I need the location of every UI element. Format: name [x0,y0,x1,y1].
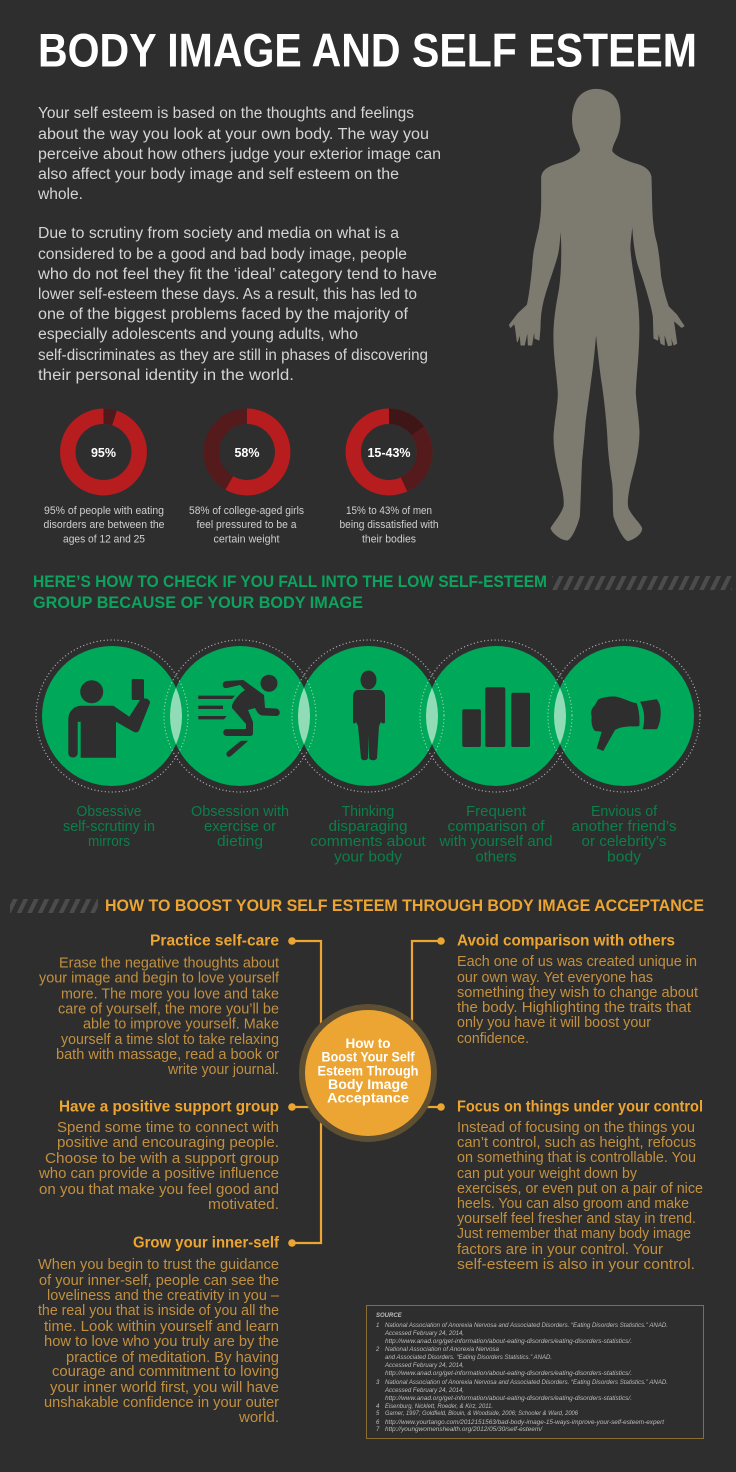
intro text block: one of the biggest problems faced by the majority of [38,306,409,323]
panel: grow your inner-self: Grow your inner-self [133,1234,280,1252]
panel: practice self-care: yourself a time slot to take relaxing [61,1032,279,1048]
central circle: Acceptance [327,1090,409,1106]
icon: standing figure [353,670,385,760]
caption: 58%: certain weight [214,534,280,546]
panel: sources: National Association of Anorexia Nervosa and Associated Disorders. “Eating Disorders Statistics.” ANAD. [385,1380,668,1386]
panel: sources: 6 [376,1420,380,1426]
panel: positive support group: Choose to be with a support group [45,1151,279,1167]
panel: sources: Garner, 1997; Goldfield, Blouin, & Woodside, 2006; Schooler & Ward, 2006 [385,1411,579,1417]
panel: sources: Accessed February 24, 2014, [384,1331,464,1337]
caption: 15-43% [340,505,438,546]
panel: avoid comparison: Avoid comparison with others [457,932,675,950]
panel: practice self-care: care of yourself, the more you’ll be [58,1001,279,1017]
panel: focus on things under your control: factors are in your control. Your [457,1242,663,1258]
caption: mirrors: Obsessive [76,803,142,820]
caption: envious: body [607,848,642,866]
intro text block [37,105,441,384]
caption: 95%: 95% of people with eating [44,505,164,517]
panel: practice self-care: Erase the negative thoughts about [59,956,279,972]
panel: sources: Accessed February 24, 2014, [384,1388,464,1394]
panel: grow your inner-self: practice of meditation. By having [66,1350,279,1366]
caption: comparison: others [476,848,516,866]
caption: 58%: feel pressured to be a [196,519,297,531]
panel: practice self-care [39,932,280,1078]
caption: disparaging comments [310,803,427,866]
panel: focus on things under your control: yourself feel fresher and stay in trend. [457,1211,696,1227]
panel: practice self-care: able to improve yourself. Make [83,1016,279,1032]
panel: sources: 4 [376,1404,380,1410]
panel: sources: 3 [376,1380,380,1386]
panel: grow your inner-self: the real you that is inside of you all the [38,1303,279,1319]
panel: sources: National Association of Anorexia Nervosa and Associated Disorders. “Eating Disorders Statistics.” ANAD. [385,1323,668,1329]
panel: sources: http://www.yourtango.com/2012151563/bad-body-image-15-ways-improve-your-self-esteem-expert [385,1420,664,1426]
panel: sources: 7 [376,1427,380,1433]
caption: 95%: ages of 12 and 25 [63,534,145,546]
panel: focus on things under your control: exercises, or even put on a pair of nice [457,1181,703,1197]
caption: comparison [438,803,552,866]
panel: positive support group [38,1098,279,1213]
panel: focus on things under your control: heels. You can also groom and make [457,1196,689,1212]
donut chart: 95% [68,416,139,488]
intro text block: Due to scrutiny from society and media on what is a [38,225,399,242]
caption: exercise [191,803,289,850]
caption: envious [572,803,676,866]
icon: person with phone [68,679,150,758]
panel: practice self-care: bath with massage, read a book or [56,1047,279,1063]
caption: exercise: dieting [217,833,263,850]
caption: comparison: comparison of [448,818,545,835]
panel: sources: Eisenburg, Nicklett, Roeder, & Kirz, 2011. [385,1404,493,1410]
heading: low self-esteem check: HERE’S HOW TO CHECK IF YOU FALL INTO THE LOW SELF-ESTEEM [33,572,547,591]
panel: positive support group: Spend some time to connect with [57,1120,279,1136]
caption: mirrors: mirrors [88,833,130,850]
panel: focus on things under your control: can put your weight down by [457,1166,638,1182]
panel: sources: http://www.anad.org/get-information/about-eating-disorders/eating-disorders-statistics/. [385,1396,632,1402]
panel: grow your inner-self: courage and commitment to loving [52,1364,279,1380]
central circle [299,1004,437,1142]
intro text block: especially adolescents and young adults, who [38,326,358,343]
panel: grow your inner-self: of your inner-self, people can see the [39,1273,279,1289]
panel: sources: 2 [375,1347,380,1353]
central circle: Esteem Through [318,1062,418,1078]
icon: thumbs down [591,696,661,751]
panel: grow your inner-self: your inner world first, you will have [50,1380,279,1396]
intro text block: about the way you look at your own body. The way you [38,126,429,143]
intro text block: self-discriminates as they are still in phases of discovering [38,347,428,364]
caption: mirrors: self-scrutiny in [63,818,155,835]
panel: avoid comparison: confidence. [457,1031,529,1047]
panel: positive support group: positive and encouraging people. [57,1135,279,1151]
connector lines [288,937,445,1247]
panel: avoid comparison: only you have it will boost your [457,1015,651,1031]
central circle: Body Image [328,1076,408,1092]
caption: comparison: Frequent [466,803,527,820]
central circle: Boost Your Self [322,1048,415,1064]
heading: low self-esteem check [33,572,547,612]
icon: bar chart [462,687,530,747]
panel: focus on things under your control: Focus on things under your control [457,1098,703,1116]
donut chart: 15-43% [353,416,425,488]
body silhouette [509,89,684,541]
central circle: How to [346,1035,390,1051]
panel: sources: http://www.anad.org/get-information/about-eating-disorders/eating-disorders-statistics/. [385,1339,632,1345]
icon: runner [198,675,280,757]
intro text block: Your self esteem is based on the thoughts and feelings [38,105,414,122]
intro text block: their personal identity in the world. [38,367,294,384]
panel: sources [366,1306,704,1438]
caption: envious: or celebrity’s [582,833,666,850]
panel: positive support group: on you that make you feel good and [39,1182,279,1198]
donut chart: 58%: 58% [234,446,260,460]
intro text block: also affect your body image and self esteem on the [38,166,399,183]
panel: focus on things under your control: can’t control, such as height, refocus [457,1135,696,1151]
panel: sources: Accessed February 24, 2014, [384,1363,464,1369]
panel: grow your inner-self: unshakable confidence in your outer [44,1395,279,1411]
panel: practice self-care: more. The more you love and take [61,986,279,1002]
panel: practice self-care: your image and begin to love yourself [39,971,280,987]
panel: grow your inner-self: loveliness and the creativity in you – [47,1288,280,1304]
heading: low self-esteem check: GROUP BECAUSE OF YOUR BODY IMAGE [33,593,363,612]
caption: exercise: exercise or [204,818,276,835]
panel: avoid comparison: Each one of us was created unique in [457,954,697,970]
caption: envious: Envious of [591,803,658,820]
caption: mirrors [63,803,155,850]
panel: sources: 1 [376,1323,379,1329]
panel: grow your inner-self: When you begin to trust the guidance [38,1257,279,1273]
panel: avoid comparison [457,932,698,1047]
panel: positive support group: motivated. [208,1197,279,1213]
intro text block: lower self-esteem these days. As a result, this has led to [38,286,417,303]
caption: 15-43%: 15% to 43% of men [346,505,432,517]
panel: focus on things under your control [457,1098,703,1273]
intro text block: whole. [37,186,83,203]
donut chart: 15-43%: 15-43% [367,446,411,460]
panel: sources: http://youngwomenshealth.org/2012/05/30/self-esteem/ [385,1427,543,1433]
caption: disparaging comments: comments about [310,833,427,850]
caption: comparison: with yourself and [438,833,552,850]
panel: focus on things under your control: on something that is controllable. You [457,1150,696,1166]
panel: sources: SOURCE [376,1313,403,1319]
panel: grow your inner-self: how to love who you truly are by the [44,1334,279,1350]
caption: exercise: Obsession with [191,803,289,820]
panel: sources: 5 [376,1411,380,1417]
caption: envious: another friend’s [572,818,676,835]
panel: grow your inner-self: time. Look within yourself and learn [44,1319,279,1335]
panel: grow your inner-self: world. [238,1410,279,1426]
intro text block: perceive about how others judge your exterior image can [38,146,441,163]
caption: disparaging comments: disparaging [328,818,408,835]
intro text block: considered to be a good and bad body image, people [38,246,407,263]
caption: 58% [189,505,304,546]
caption: disparaging comments: your body [334,848,403,866]
panel: positive support group: who can provide a positive influence [38,1166,279,1182]
green circles row [36,640,700,792]
heading: how to boost: HOW TO BOOST YOUR SELF ESTEEM THROUGH BODY IMAGE ACCEPTANCE [105,896,704,915]
panel: focus on things under your control: Instead of focusing on the things you [457,1120,695,1136]
caption: 58%: 58% of college-aged girls [189,505,304,517]
caption: 95%: disorders are between the [44,519,164,531]
panel: avoid comparison: something they wish to change about [457,985,698,1001]
panel: focus on things under your control: Just remember that many body image [457,1226,691,1242]
intro text block: who do not feel they fit the ‘ideal’ category tend to have [37,266,437,283]
panel: sources: and Associated Disorders. “Eating Disorders Statistics.” ANAD. [385,1355,552,1361]
panel: avoid comparison: the body. Highlighting the traits that [457,1000,691,1016]
panel: avoid comparison: our own way. Yet everyone has [457,970,653,986]
panel: grow your inner-self [38,1234,280,1426]
donut chart: 95%: 95% [91,446,116,460]
panel: sources: http://www.anad.org/get-information/about-eating-disorders/eating-disorders-statistics/. [385,1371,632,1377]
panel: sources: National Association of Anorexia Nervosa [385,1347,500,1353]
panel: practice self-care: Practice self-care [150,932,279,950]
caption: 15-43%: their bodies [362,534,416,546]
caption: disparaging comments: Thinking [342,803,394,820]
panel: practice self-care: write your journal. [167,1062,279,1078]
panel: positive support group: Have a positive support group [59,1098,279,1116]
caption: 15-43%: being dissatisfied with [340,519,438,531]
caption: 95% [44,505,164,546]
panel: focus on things under your control: self-esteem is also in your control. [457,1257,695,1273]
donut chart: 58% [211,416,283,488]
